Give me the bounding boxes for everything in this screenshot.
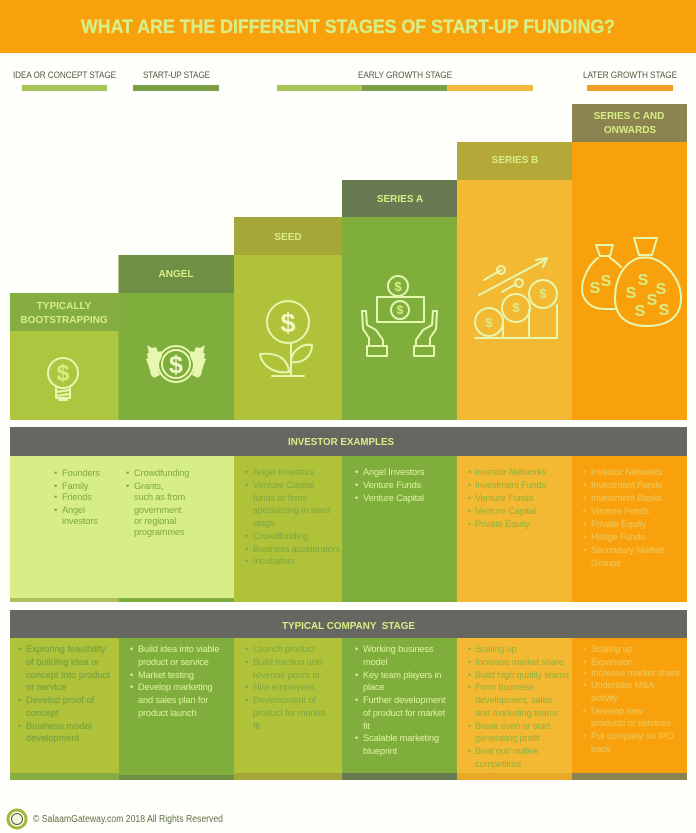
text: company, idea stage: Exploring feasibility xyxy=(26,644,106,654)
text: company, series B: competitors xyxy=(475,759,522,769)
text: company, angel: • xyxy=(130,644,133,654)
text: company, series A: Working business xyxy=(363,644,434,654)
text: company, seed: product for market xyxy=(253,708,326,718)
text: company, series A: model xyxy=(363,657,388,667)
text: investors, seed: • xyxy=(245,544,248,554)
heading: investor examples: INVESTOR EXAMPLES xyxy=(288,437,394,448)
text: investors, series A: Venture Capital xyxy=(363,493,424,503)
text: investors, idea stage: Founders xyxy=(62,468,100,478)
text: investors, series B: • xyxy=(468,480,471,490)
text: investors, series B: • xyxy=(468,519,471,529)
text: company, idea stage: or service xyxy=(26,682,66,692)
text: investors, angel: such as from xyxy=(134,492,185,502)
text: company, series B: Form business xyxy=(475,682,534,692)
text: company, idea stage: concept xyxy=(26,708,59,718)
text: investors, series C xyxy=(583,467,664,568)
text: investors, series A: Angel Investors xyxy=(363,467,425,477)
title banner: WHAT ARE THE DIFFERENT STAGES OF START-UP FUNDING? xyxy=(81,16,615,38)
text: company, idea stage: concept into product xyxy=(26,670,110,680)
text: investors, idea stage: Angel xyxy=(62,505,85,515)
text: company, series B xyxy=(468,644,569,769)
text: company, seed: Launch product xyxy=(253,644,315,654)
icon: hands holding money: $ xyxy=(397,303,404,317)
text: investors, series B: Investor Networks xyxy=(475,467,547,477)
panel: series C column: SERIES C AND xyxy=(594,111,664,122)
text: investors, seed: stage xyxy=(253,518,275,528)
text: investors, idea stage: Family xyxy=(62,481,89,491)
text: investors, idea stage: investors xyxy=(62,516,98,526)
text: company, series A: place xyxy=(363,682,384,692)
text: company, series C: Increase market share xyxy=(591,668,680,678)
text: company, series B: Increase market share xyxy=(475,657,564,667)
text: investors, series B: Private Equity xyxy=(475,519,530,529)
text: investors, idea stage: • xyxy=(54,505,57,515)
text: company, series B: • xyxy=(468,657,471,667)
text: company, series A: blueprint xyxy=(363,746,398,756)
icon: money bags: S xyxy=(626,285,637,302)
stage timeline: START-UP STAGE xyxy=(143,70,210,80)
text: company, series C: Scaling up xyxy=(591,644,633,654)
text: investors, series C: • xyxy=(583,493,586,503)
text: investors, series C: Investment Funds xyxy=(591,480,663,490)
text: company, idea stage: development xyxy=(26,733,80,743)
text: company, series A: • xyxy=(355,670,358,680)
text: company, series B: Build high quality teams xyxy=(475,670,569,680)
panel: series B column: SERIES B xyxy=(492,155,538,166)
text: investors, angel: programmes xyxy=(134,527,185,537)
text: company, series C: • xyxy=(583,668,586,678)
icon: money bags: S xyxy=(590,280,601,297)
text: investors, series C: • xyxy=(583,519,586,529)
text: company, seed xyxy=(245,644,326,731)
text: investors, series C: Investor Networks xyxy=(591,467,663,477)
stage timeline xyxy=(13,70,677,91)
panel: angel column xyxy=(118,255,234,420)
stage timeline: IDEA OR CONCEPT STAGE xyxy=(13,70,116,80)
text: company, angel: and sales plan for xyxy=(138,695,208,705)
text: company, series C: track xyxy=(591,744,611,754)
text: company, series B: • xyxy=(468,670,471,680)
text: company, series A: Scalable marketing xyxy=(363,733,439,743)
text: investors, seed: • xyxy=(245,467,248,477)
icon: money bags: S xyxy=(659,302,670,319)
text: company, series B: • xyxy=(468,644,471,654)
text: company, idea stage: • xyxy=(18,695,21,705)
text: company, idea stage xyxy=(18,644,110,743)
panel: series C column: ONWARDS xyxy=(604,125,656,136)
text: investors, seed: • xyxy=(245,556,248,566)
text: company, series A xyxy=(355,644,446,756)
text: company, series B: • xyxy=(468,746,471,756)
text: company, angel xyxy=(130,644,219,718)
icon: hands holding money xyxy=(362,276,437,356)
text: investors, series A: • xyxy=(355,493,358,503)
text: investors, series B: Venture Capital xyxy=(475,506,536,516)
text: company, idea stage: Business model xyxy=(26,721,92,731)
text: investors, series B: Venture Funds xyxy=(475,493,534,503)
text: investors, series C: Secondary Market xyxy=(591,545,664,555)
icon: growing coins and arrow xyxy=(475,258,557,338)
text: company, series A: Key team players in xyxy=(363,670,441,680)
text: investors, idea stage: Friends xyxy=(62,492,92,502)
icon: growing coins and arrow: $ xyxy=(512,300,520,315)
text: company, angel: Develop marketing xyxy=(138,682,212,692)
stage timeline: EARLY GROWTH STAGE xyxy=(358,70,452,80)
heading: typical company stage xyxy=(10,610,687,638)
text: company, series A: Further development xyxy=(363,695,446,705)
text: investors, series B: • xyxy=(468,506,471,516)
text: investors, series C: • xyxy=(583,532,586,542)
icon: money plant: $ xyxy=(280,308,296,338)
text: company, series A: • xyxy=(355,644,358,654)
text: company, series A: • xyxy=(355,733,358,743)
text: company, series C: Undertake M&A xyxy=(591,680,655,690)
text: company, idea stage: of building idea or xyxy=(26,657,99,667)
text: investors, seed: specializing in seed xyxy=(253,505,330,515)
text: company, series C: • xyxy=(583,731,586,741)
icon: money plant xyxy=(260,301,312,376)
text: investors, series C: Groups xyxy=(591,558,621,568)
text: company, series C: Expansion xyxy=(591,657,633,667)
icon: light bulb xyxy=(48,358,78,400)
text: company, series B: generating profit xyxy=(475,733,540,743)
icon: winged coin: $ xyxy=(169,351,183,379)
text: company, seed: fit xyxy=(253,721,260,731)
panel: seed column xyxy=(234,217,342,420)
text: company, series C: • xyxy=(583,706,586,716)
text: company, seed: • xyxy=(245,657,248,667)
text: company, series C: • xyxy=(583,680,586,690)
panel: series A column: SERIES A xyxy=(377,194,423,205)
title banner xyxy=(0,0,696,53)
text: company, seed: revenue pours in xyxy=(253,670,319,680)
text: investors, series B: • xyxy=(468,493,471,503)
text: company, angel: Build idea into viable xyxy=(138,644,219,654)
text: investors, series C: Investment Banks xyxy=(591,493,663,503)
text: investors, angel: • xyxy=(126,481,129,491)
heading: typical company stage: TYPICAL COMPANY STAGE xyxy=(282,621,415,632)
icon: growing coins and arrow: $ xyxy=(485,315,493,330)
text: company, series B: Beat out/ outlive xyxy=(475,746,539,756)
text: investors, idea stage: • xyxy=(54,468,57,478)
text: company, angel: product launch xyxy=(138,708,196,718)
text: investors, idea stage xyxy=(54,468,100,526)
text: investors, series C: Private Equity xyxy=(591,519,646,529)
icon: winged coin xyxy=(146,345,206,382)
text: company, angel: Market testing xyxy=(138,670,194,680)
panel: series A column xyxy=(342,180,457,420)
heading: investor examples xyxy=(10,427,687,456)
panel: typically bootstrapping column: BOOTSTRAPPING xyxy=(20,315,108,326)
text: company, series A: fit xyxy=(363,721,370,731)
text: investors, seed xyxy=(245,467,341,566)
text: investors, series A: Venture Funds xyxy=(363,480,422,490)
text: company, angel: • xyxy=(130,682,133,692)
text: company, seed: • xyxy=(245,682,248,692)
icon: light bulb: $ xyxy=(57,360,70,386)
text: company, seed: Hire employees xyxy=(253,682,316,692)
text: company, series B: development, sales xyxy=(475,695,552,705)
text: company, series A: of product for market xyxy=(363,708,446,718)
text: investors, angel: • xyxy=(126,468,129,478)
text: investors, angel: Crowdfunding xyxy=(134,468,189,478)
text: company, seed: Build traction until xyxy=(253,657,323,667)
text: company, series C: products or services xyxy=(591,718,671,728)
icon: money bags: S xyxy=(647,292,658,309)
icon: money bags: S xyxy=(656,281,667,298)
text: company, angel: • xyxy=(130,670,133,680)
text: company, series C: • xyxy=(583,657,586,667)
text: company, series B: • xyxy=(468,721,471,731)
text: company, series B: Scaling up xyxy=(475,644,517,654)
text: investors, series A: • xyxy=(355,480,358,490)
text: investors, angel xyxy=(126,468,189,537)
text: company, series C: Put company on IPO xyxy=(591,731,674,741)
text: investors, seed: Crowdfunding xyxy=(253,531,308,541)
text: investors, angel: government xyxy=(134,505,182,515)
text: company, idea stage: • xyxy=(18,721,21,731)
text: investors, series C: Hedge Funds xyxy=(591,532,645,542)
text: investors, series B xyxy=(468,467,547,529)
panel: series B column xyxy=(457,142,572,420)
text: company, series B: • xyxy=(468,682,471,692)
text: company, series A: • xyxy=(355,695,358,705)
text: investors, series C: • xyxy=(583,480,586,490)
icon: money bags: S xyxy=(601,273,612,290)
panel: investor examples columns xyxy=(10,456,687,602)
text: company, seed: Development of xyxy=(253,695,316,705)
footer logo xyxy=(8,810,26,828)
text: investors, series C: Venture Funds xyxy=(591,506,650,516)
text: company, series C: • xyxy=(583,644,586,654)
text: company, series C: Develop new xyxy=(591,706,643,716)
text: investors, seed: funds or firms xyxy=(253,493,307,503)
text: company, seed: • xyxy=(245,695,248,705)
text: investors, idea stage: • xyxy=(54,492,57,502)
text: company, series B: and marketing teams xyxy=(475,708,559,718)
icon: hands holding money: $ xyxy=(394,279,402,294)
panel: series C column xyxy=(572,104,687,420)
panel: angel column: ANGEL xyxy=(158,269,194,280)
text: investors, series B: • xyxy=(468,467,471,477)
text: investors, series C: • xyxy=(583,467,586,477)
text: investors, seed: Venture Capital xyxy=(253,480,314,490)
text: company, series C: activity xyxy=(591,693,619,703)
text: investors, series C: • xyxy=(583,545,586,555)
stage timeline: LATER GROWTH STAGE xyxy=(583,70,677,80)
text: investors, angel: Grants, xyxy=(134,481,163,491)
icon: money bags xyxy=(582,238,681,326)
panel: typical company stage columns xyxy=(10,638,687,780)
text: investors, seed: Angel Investors xyxy=(253,467,315,477)
panel: typically bootstrapping column: TYPICALLY xyxy=(37,301,92,312)
icon: growing coins and arrow: $ xyxy=(539,286,547,301)
text: company, series B: Break even or start xyxy=(475,721,551,731)
text: investors, series A xyxy=(355,467,425,503)
text: investors, seed: • xyxy=(245,480,248,490)
icon: money bags: S xyxy=(638,272,649,289)
panel: seed column: SEED xyxy=(274,232,302,243)
text: investors, angel: or regional xyxy=(134,516,176,526)
text: investors, seed: Business accelerators xyxy=(253,544,341,554)
text: investors, series C: • xyxy=(583,506,586,516)
text: investors, seed: • xyxy=(245,531,248,541)
text: company, idea stage: • xyxy=(18,644,21,654)
text: investors, idea stage: • xyxy=(54,481,57,491)
text: company, seed: • xyxy=(245,644,248,654)
text: investors, series A: • xyxy=(355,467,358,477)
text: investors, series B: Investment Funds xyxy=(475,480,547,490)
text: company, idea stage: Develop proof of xyxy=(26,695,95,705)
text: company, angel: product or service xyxy=(138,657,209,667)
footer copyright: © SalaamGateway.com 2018 All Rights Reserved xyxy=(33,814,223,825)
text: company, series C xyxy=(583,644,680,754)
icon: money bags: S xyxy=(635,303,646,320)
panel: typically bootstrapping column xyxy=(10,293,119,420)
text: investors, seed: Incubators xyxy=(253,556,295,566)
